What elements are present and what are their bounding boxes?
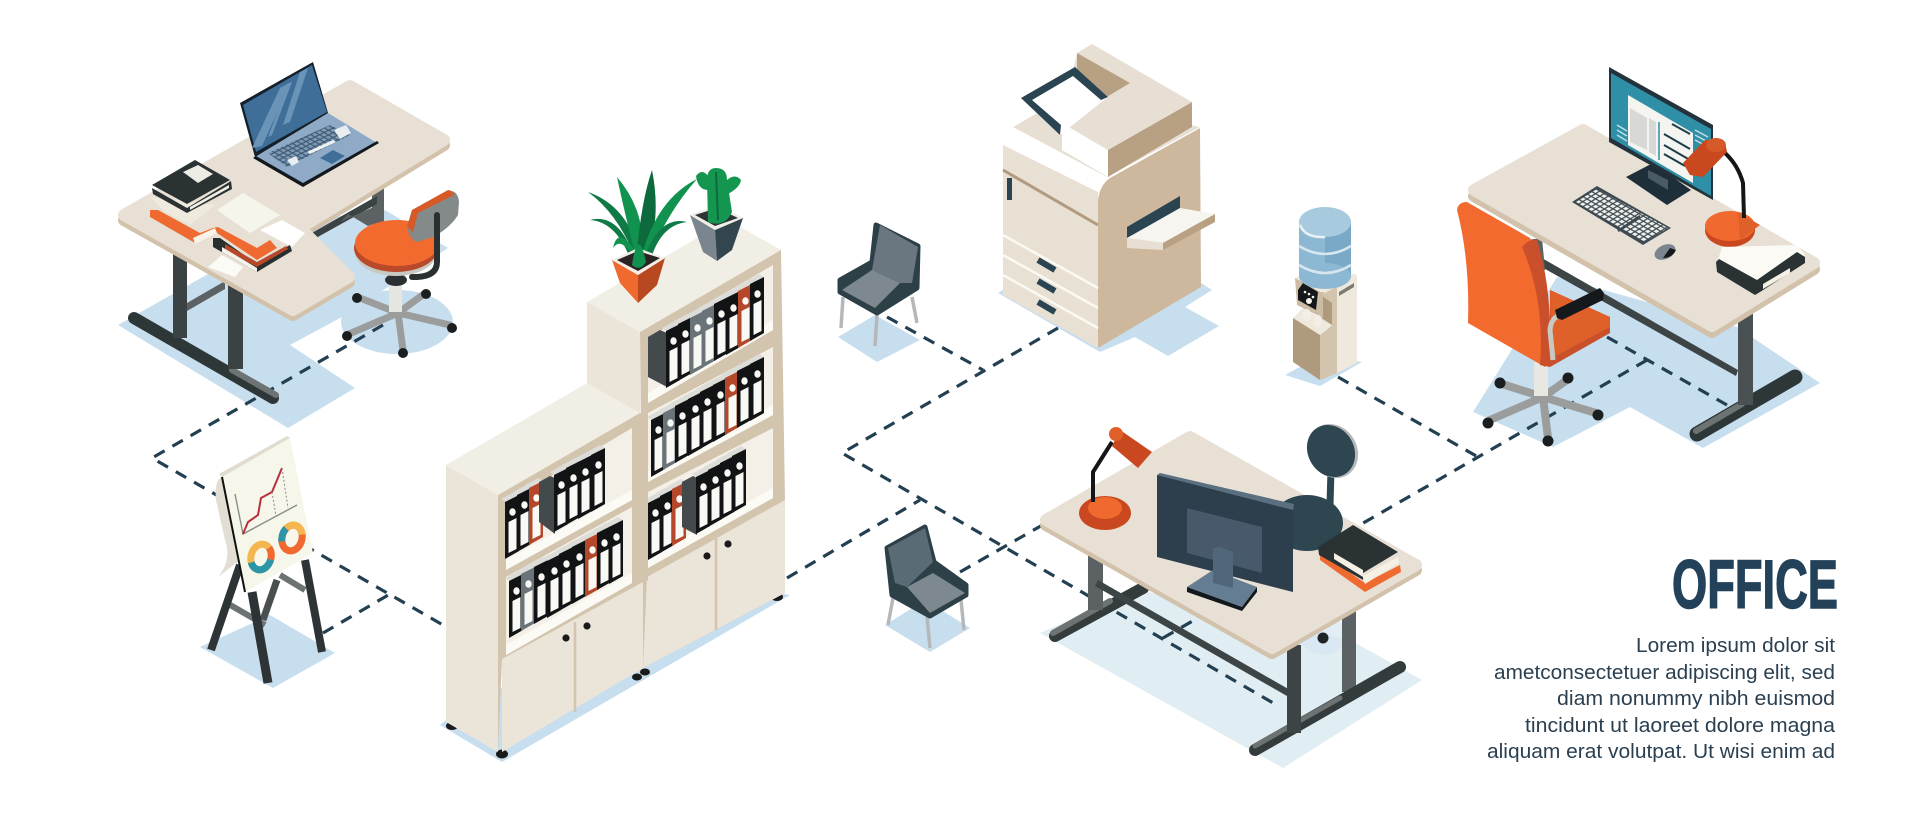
water bottle: [1299, 207, 1351, 289]
water cooler: [1293, 207, 1357, 380]
tall bookcase with plants: [446, 168, 785, 758]
description text: tincidunt ut laoreet dolore magna: [1525, 715, 1836, 737]
description text: aliquam erat volutpat. Ut wisi enim ad: [1487, 741, 1835, 763]
desk frame: [1053, 555, 1400, 750]
open binder: [1716, 245, 1805, 295]
floor shadows: [118, 210, 1820, 768]
desk with computer, top right: [1457, 67, 1814, 446]
potted palm plant: [588, 170, 697, 303]
description text: diam nonummy nibh euismod: [1557, 688, 1835, 710]
binders, upper row: [648, 274, 764, 388]
orange book and papers: [150, 193, 305, 277]
left cabinet doors: [502, 582, 643, 752]
binders, lower row: [644, 446, 746, 560]
description text: [1487, 635, 1836, 763]
binders, left unit top row: [501, 445, 605, 559]
chair, lower: [887, 527, 966, 648]
cabinet feet: [446, 593, 783, 758]
orange desk lamp: [1079, 427, 1152, 530]
center table top: [1046, 437, 1416, 653]
desk legs: [134, 185, 384, 398]
binders, left unit bottom row: [505, 517, 623, 638]
keyboard: [1572, 186, 1671, 245]
cactus in grey pot: [690, 168, 743, 261]
title: OFFICE: [1672, 546, 1838, 623]
laptop: [240, 62, 379, 187]
desk with laptop, top left: [124, 62, 459, 398]
easel legs: [211, 560, 322, 683]
dark task chair behind monitor: [1271, 415, 1368, 551]
photocopier: [1003, 44, 1215, 348]
binders, middle row: [647, 354, 764, 477]
orange swivel chair: [342, 190, 459, 358]
dashed connector lines: [152, 317, 1727, 707]
description text: Lorem ipsum dolor sit: [1636, 635, 1835, 657]
copier top box and document feeder: [1021, 44, 1192, 177]
black binder book: [152, 160, 232, 213]
desk with monitor, center: [1046, 415, 1416, 750]
chart paper: [216, 436, 313, 592]
right table top: [1474, 130, 1814, 332]
orange desk lamp: [1683, 138, 1760, 247]
copier body: [1003, 100, 1201, 348]
task chair wheel under desk: [1300, 615, 1346, 655]
right cabinet doors: [643, 500, 785, 668]
stacked books: [1318, 525, 1401, 592]
orange office chair: [1457, 202, 1610, 446]
lower unit: [446, 383, 648, 752]
upper unit: [587, 220, 785, 668]
monitor back: [1157, 473, 1294, 611]
desk frame: [1527, 238, 1795, 434]
L-shaped table top: [124, 86, 444, 315]
mouse: [1652, 241, 1678, 263]
description text: ametconsectetuer adipiscing elit, sed: [1494, 662, 1835, 684]
chair, upper: [840, 225, 918, 346]
monitor front: [1609, 67, 1713, 205]
copier output tray: [1127, 196, 1215, 250]
flip chart easel: [211, 436, 322, 683]
donut charts: [248, 523, 305, 572]
